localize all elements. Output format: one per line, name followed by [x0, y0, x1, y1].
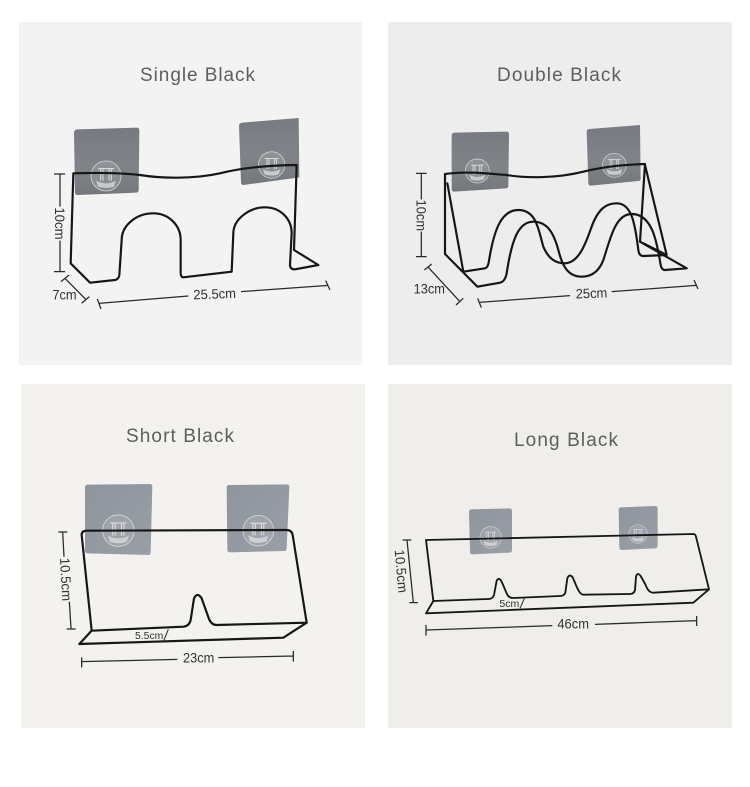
panel: single black — [19, 22, 362, 365]
dimension: 25.5cm: 25.5cm — [193, 286, 236, 302]
dimension: 46cm: 46cm — [557, 617, 589, 632]
dimension: 7cm: 7cm — [52, 287, 77, 302]
dimension: 10.5cm: 10.5cm — [57, 557, 74, 601]
dimension: 10cm: 10cm — [52, 207, 67, 240]
dimension: 5cm: 5cm — [499, 599, 519, 610]
dimension: 10.5cm — [57, 532, 76, 629]
title: short black: Short Black — [126, 426, 234, 447]
dimension: 23cm: 23cm — [183, 650, 214, 665]
dimension: 10cm — [413, 173, 428, 257]
dimension: 10cm — [52, 174, 67, 272]
rack drawing: short black — [57, 484, 307, 667]
dimension: 10cm: 10cm — [413, 200, 428, 231]
panel: short black — [21, 384, 365, 728]
title: double black: Double Black — [497, 65, 622, 86]
panel: double black — [388, 22, 732, 365]
title: single black: Single Black — [140, 65, 256, 86]
title: long black: Long Black — [514, 430, 618, 451]
dimension: 10.5cm — [392, 540, 418, 603]
dimension: 23cm — [82, 650, 293, 667]
dimension: 13cm — [414, 264, 463, 305]
panel: long black — [388, 384, 732, 728]
rack drawing: long black — [392, 506, 709, 636]
rack drawing: double black — [413, 125, 698, 308]
dimension: 7cm — [52, 275, 89, 303]
dimension: 25cm — [478, 280, 698, 308]
dimension: 25cm: 25cm — [575, 285, 608, 302]
dimension: 5.5cm: 5.5cm — [135, 631, 163, 642]
rack drawing: single black — [52, 118, 330, 309]
dimension: 25.5cm — [97, 281, 330, 309]
dimension: 10.5cm: 10.5cm — [392, 549, 410, 593]
dimension: 46cm — [426, 616, 697, 636]
dimension: 13cm: 13cm — [414, 282, 445, 297]
